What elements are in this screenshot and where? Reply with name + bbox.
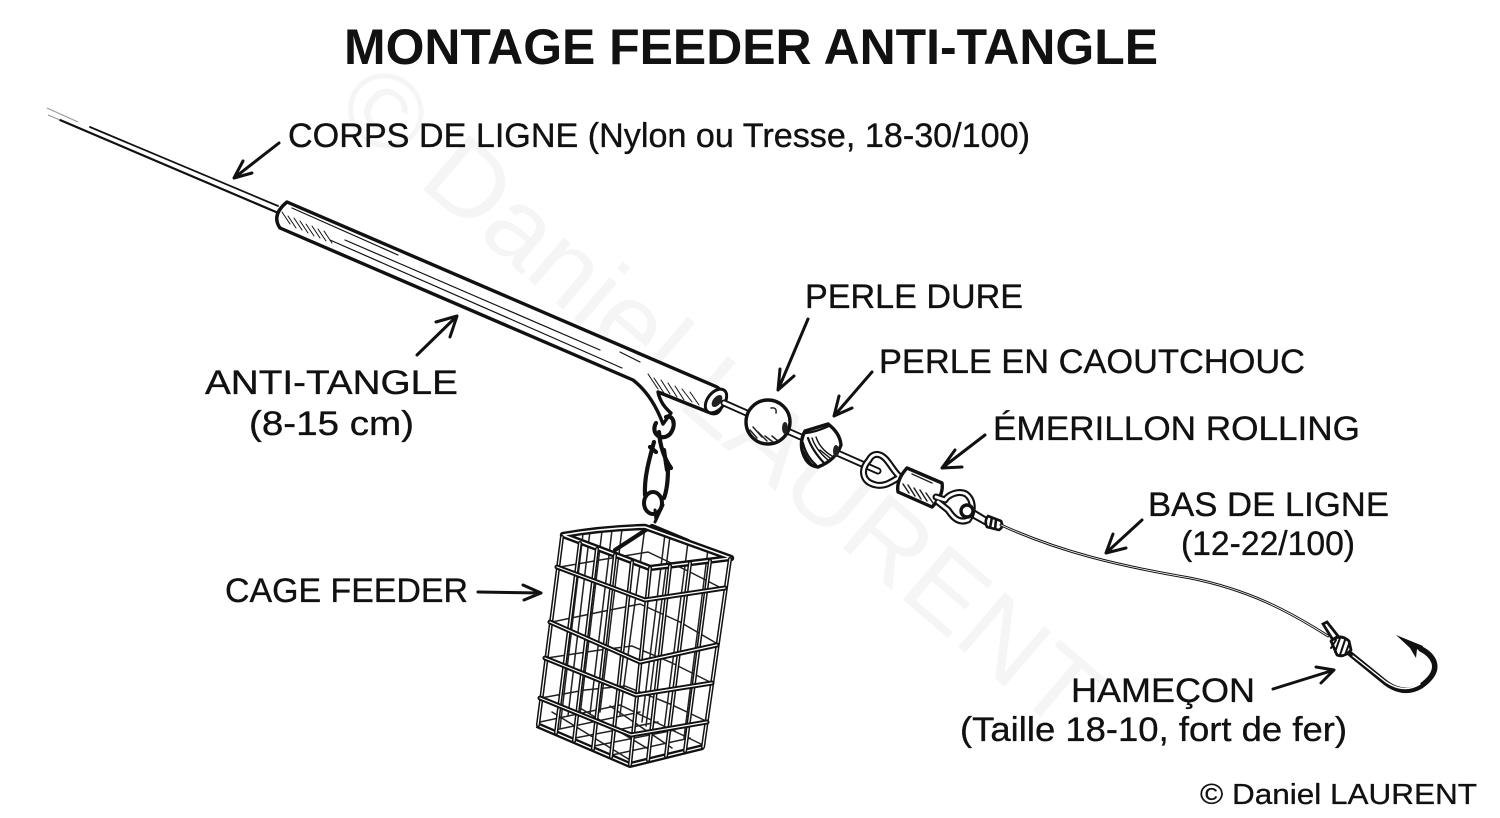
label: corps de ligne: CORPS DE LIGNE (Nylon ou Tresse, 18-30/100) xyxy=(288,117,1030,155)
cage bands xyxy=(540,567,725,735)
snap link and clip xyxy=(644,416,674,522)
anti-tangle tube xyxy=(277,202,731,424)
cage back wires xyxy=(540,527,725,760)
label: bas de ligne xyxy=(1148,486,1389,563)
cage feeder xyxy=(537,526,731,765)
label: anti-tangle: (8-15 cm) xyxy=(249,405,414,443)
knot xyxy=(986,516,1002,530)
label: emerillon: ÉMERILLON ROLLING xyxy=(993,410,1360,448)
bridle xyxy=(615,526,688,550)
cage top rim and base xyxy=(537,527,731,765)
rubber bead xyxy=(801,424,841,467)
leader line xyxy=(1001,525,1328,636)
arrow: emerillon xyxy=(942,435,985,468)
cage front verticals xyxy=(538,537,730,765)
arrow: perle dure xyxy=(778,319,808,390)
arrow: perle en caoutchouc xyxy=(834,372,872,416)
label: hamecon: (Taille 18-10, fort de fer) xyxy=(960,711,1347,749)
arrow: hamecon xyxy=(1273,667,1334,689)
label: perle en caoutchouc: PERLE EN CAOUTCHOUC xyxy=(879,343,1305,381)
label: perle dure: PERLE DURE xyxy=(805,278,1023,316)
arrow: cage feeder xyxy=(478,585,541,600)
arrow: corps de ligne xyxy=(234,143,279,178)
hook xyxy=(1323,622,1435,690)
label: hamecon: HAMEÇON xyxy=(1071,672,1255,710)
watermark: © Daniel LAURENT xyxy=(317,41,1122,753)
label: anti-tangle xyxy=(205,364,458,443)
title: MONTAGE FEEDER ANTI-TANGLE xyxy=(344,19,1158,75)
label: bas de ligne: BAS DE LIGNE xyxy=(1148,486,1389,524)
label: hamecon xyxy=(960,672,1347,749)
rolling swivel xyxy=(864,454,990,526)
leader shaft through beads xyxy=(724,403,878,471)
hard bead xyxy=(746,400,790,444)
copyright: © Daniel LAURENT xyxy=(1200,779,1477,811)
label: cage feeder: CAGE FEEDER xyxy=(225,572,468,610)
main line xyxy=(47,108,278,212)
label: anti-tangle: ANTI-TANGLE xyxy=(205,364,458,402)
label: bas de ligne: (12-22/100) xyxy=(1181,525,1355,563)
arrow: anti-tangle xyxy=(417,316,457,355)
arrow: bas de ligne xyxy=(1106,520,1142,553)
